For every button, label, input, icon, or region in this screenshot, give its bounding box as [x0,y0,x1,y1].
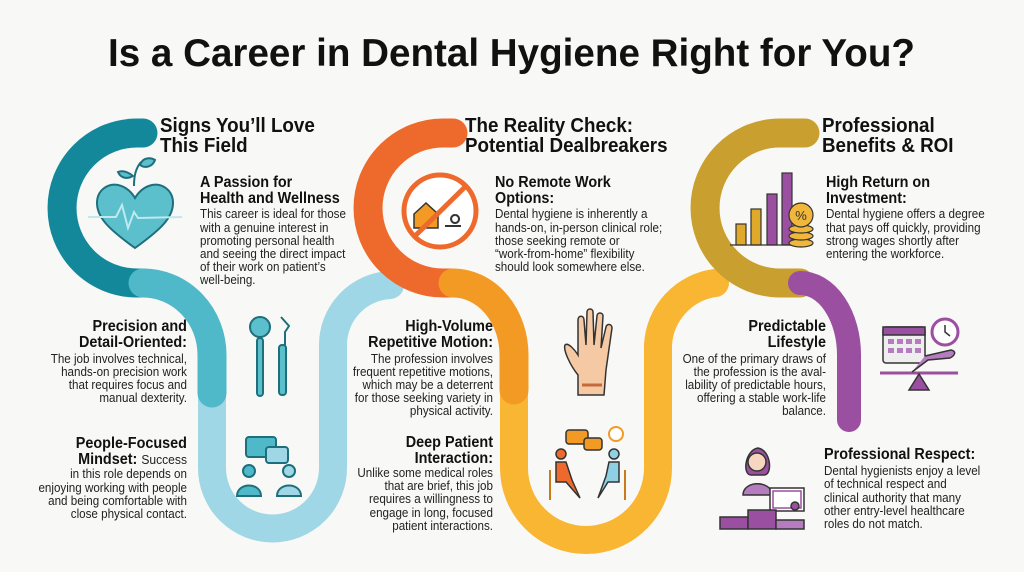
icon: professional with certificate [720,448,804,529]
item: passion: of their work on patient’s [200,260,326,274]
item: no remote: hands-on, in-person clinical role; [495,221,662,235]
item: people-focused: close physical contact. [71,507,187,521]
section heading: signs [160,114,315,157]
item: deep patient interaction: Deep Patient [406,434,493,451]
item: professional respect: of technical respect and [824,477,947,491]
item: deep patient interaction: Interaction: [415,450,493,467]
item: predictable lifestyle: balance. [782,404,826,418]
item: precision: hands-on precision work [61,365,188,379]
item: ROI: entering the workforce. [826,247,944,261]
icon: seated people conversation [550,427,625,500]
item: professional respect: Dental hygienists enjoy a level [824,464,980,478]
item: deep patient interaction [357,434,493,533]
icon: chat people [237,437,301,496]
item: passion: with a genuine interest in [199,221,329,235]
item: deep patient interaction: Unlike some medical roles [357,466,493,480]
item: repetitive motion: High-Volume [405,318,493,335]
item: deep patient interaction: patient interactions. [392,519,493,533]
item: repetitive motion: which may be a deterrent [362,378,494,392]
item: professional respect: roles do not match. [824,517,923,531]
ribbon: light blue path [212,285,390,528]
item: predictable lifestyle: Lifestyle [768,334,826,351]
item: predictable lifestyle [683,318,827,418]
item: ROI: that pays off quickly, providing [826,221,981,235]
item: precision: Precision and [93,318,187,335]
item: professional respect [824,446,980,531]
item: precision: that requires focus and [69,378,187,392]
item: people-focused: Mindset: Success [78,451,187,468]
section heading: benefits: Benefits & ROI [822,134,954,157]
item: people-focused [38,435,187,521]
item: no remote: those seeking remote or [495,234,620,248]
item: repetitive motion: frequent repetitive motions, [353,365,493,379]
item: deep patient interaction: requires a willingness to [369,492,493,506]
item: ROI: strong wages shortly after [826,234,959,248]
title: Is a Career in Dental Hygiene Right for You? [108,32,915,75]
icon: heart with leaves [88,158,182,248]
section heading: benefits: Professional [822,114,935,137]
ribbon: teal C [62,133,212,393]
item: repetitive motion: The profession involves [371,352,493,366]
ribbon: gold C [705,133,805,283]
item: predictable lifestyle: the profession is the aval- [694,365,826,379]
section heading: reality check: The Reality Check: [465,114,633,137]
item: professional respect: clinical authority that many [824,491,961,505]
item: passion: This career is ideal for those [200,207,346,221]
icon: dental tools [250,317,289,396]
item: people-focused: People-Focused [76,435,187,452]
item: precision: Detail-Oriented: [79,334,187,351]
item: precision [51,318,188,405]
item: deep patient interaction: engage in long, focused [370,506,493,520]
item: predictable lifestyle: lability of predictable hours, [685,378,826,392]
item: people-focused: in this role depends on [70,467,187,481]
section heading: signs: Signs You’ll Love [160,114,315,137]
item: predictable lifestyle: Predictable [748,318,826,335]
icon: no remote work sign [404,175,476,247]
item: professional respect: Professional Respect: [824,446,975,463]
item: no remote: Options: [495,190,554,207]
item: no remote: No Remote Work [495,174,611,191]
item: passion: well-being. [199,273,256,287]
item: passion [199,174,346,287]
icon: calendar clock balance [880,319,958,390]
item: no remote: “work-from-home” flexibility [495,247,634,261]
item: passion: Health and Wellness [200,190,340,207]
section heading: reality check [465,114,668,157]
section heading: benefits [822,114,954,157]
ribbon: orange C [368,133,514,390]
item: no remote [495,174,662,274]
item: ROI: Investment: [826,190,907,207]
item: ROI: High Return on [826,174,930,191]
item: predictable lifestyle: offering a stable work-life [697,391,826,405]
ribbon: purple [800,283,849,420]
item: ROI [826,174,985,261]
item: repetitive motion: for those seeking variety in [355,391,493,405]
icon: bar chart with coins: % [795,208,807,223]
item: repetitive motion: physical activity. [410,404,493,418]
item: precision: manual dexterity. [99,391,187,405]
icon: hand [565,309,612,395]
section heading: signs: This Field [160,134,248,157]
item: repetitive motion [353,318,494,418]
item: predictable lifestyle: One of the primary draws of [683,352,827,366]
item: ROI: Dental hygiene offers a degree [826,207,985,221]
item: no remote: Dental hygiene is inherently a [495,207,648,221]
item: no remote: should look somewhere else. [495,260,645,274]
item: professional respect: other entry-level healthcare [824,504,965,518]
item: repetitive motion: Repetitive Motion: [368,334,493,351]
item: precision: The job involves technical, [51,352,187,366]
section heading: reality check: Potential Dealbreakers [465,134,668,157]
item: passion: A Passion for [200,174,292,191]
item: passion: promoting personal health [200,234,334,248]
item: people-focused: enjoying working with people [38,481,187,495]
item: people-focused: and being comfortable with [48,494,187,508]
item: passion: and seeing the direct impact [200,247,346,261]
item: deep patient interaction: that are brief, this job [385,479,493,493]
icon: bar chart with coins [730,173,813,247]
ribbon: yellow path [514,283,715,540]
